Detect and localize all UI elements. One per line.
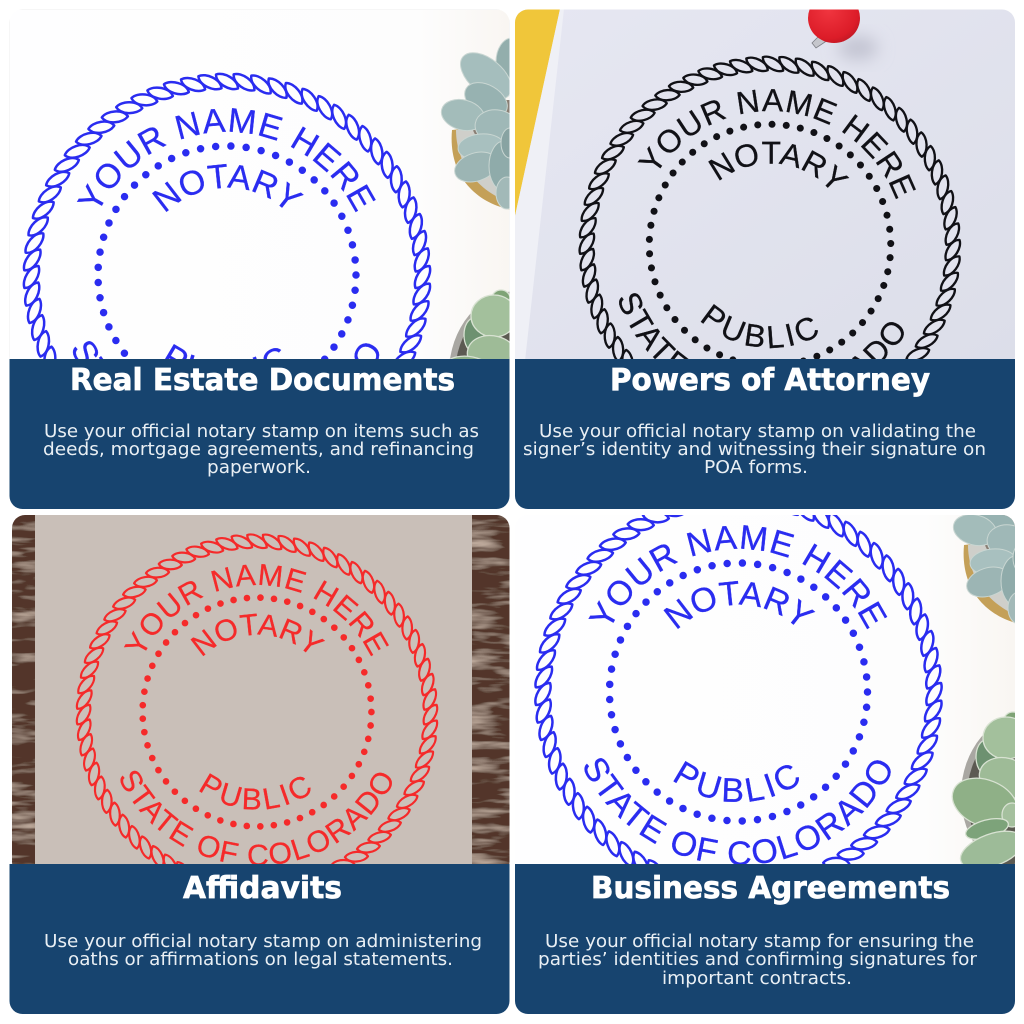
description: signer’s identity and witnessing their signature on — [523, 439, 986, 460]
description: oaths or affirmations on legal statements. — [68, 949, 453, 970]
caption bar — [515, 359, 1015, 509]
photo: white desk with succulents and blue stamp — [10, 10, 510, 359]
description — [523, 421, 986, 478]
heading: Affidavits — [183, 871, 342, 906]
description: Use your official notary stamp on administering — [44, 931, 482, 952]
description: important contracts. — [662, 968, 852, 989]
stamp: black notary seal: NOTARY — [708, 142, 850, 188]
heading: Business Agreements — [591, 871, 950, 906]
description: parties’ identities and confirming signatures for — [538, 949, 978, 970]
caption bar — [10, 359, 510, 509]
panel: affidavits — [10, 515, 510, 1014]
icon: succulent top — [440, 38, 510, 210]
panel: business agreements — [515, 515, 1015, 1014]
description: POA forms. — [704, 457, 808, 478]
stamp: black notary seal: PUBLIC — [700, 304, 818, 348]
stamp: blue notary seal: STATE OF COLORADO — [584, 758, 891, 864]
photo: cardboard on wood with red stamp — [12, 515, 510, 864]
description: deeds, mortgage agreements, and refinancing — [43, 439, 474, 460]
stamp: red notary seal: PUBLIC — [199, 773, 311, 810]
stamp: black notary seal: YOUR NAME HERE — [638, 89, 916, 200]
wood background — [12, 515, 510, 875]
stamp: black notary seal: STATE OF COLORADO — [619, 293, 904, 359]
yellow folder — [515, 9, 560, 216]
stamp: blue notary seal: STATE OF COLORADO — [72, 341, 380, 359]
description: Use your official notary stamp on items such as — [44, 421, 479, 442]
caption bar — [515, 864, 1015, 1014]
panel: powers of attorney — [515, 10, 1015, 509]
icon: succulent top — [952, 515, 1015, 624]
white paper edge — [515, 9, 564, 370]
heading: Powers of Attorney — [610, 363, 930, 398]
description — [538, 931, 978, 989]
heading: Real Estate Documents — [70, 363, 455, 398]
description — [44, 931, 482, 970]
stamp: blue notary seal: PUBLIC — [673, 761, 799, 802]
stamp: red notary seal: YOUR NAME HERE — [124, 564, 389, 656]
stamp: blue notary seal: YOUR NAME HERE — [76, 108, 376, 212]
stamp: blue notary seal: PUBLIC — [165, 344, 282, 359]
cardboard sheet — [35, 515, 472, 875]
stamp: blue notary seal: NOTARY — [152, 164, 304, 212]
photo: white desk with succulents and blue stamp — [534, 515, 1015, 864]
description: Use your official notary stamp for ensuring the — [545, 931, 974, 952]
stamp: red notary seal: NOTARY — [190, 614, 325, 656]
description: Use your official notary stamp on validating the — [539, 421, 976, 442]
stamp: red notary seal — [76, 533, 438, 864]
stamp: blue notary seal: NOTARY — [664, 580, 816, 629]
stamp: blue notary seal: YOUR NAME HERE — [588, 525, 888, 630]
stamp: red notary seal: STATE OF COLORADO — [120, 770, 392, 864]
icon: succulent bottom — [952, 712, 1015, 864]
caption bar — [10, 864, 510, 1014]
panel: real estate documents — [10, 10, 510, 509]
icon: succulent bottom — [450, 290, 510, 359]
description: paperwork. — [207, 457, 311, 478]
icon: pushpin — [808, 0, 878, 60]
stamp: blue notary seal — [534, 515, 943, 864]
photo: paper sheet with pushpin and black stamp — [515, 10, 1015, 359]
stamp: blue notary seal — [22, 72, 432, 359]
description — [43, 421, 479, 478]
stamp: black notary seal — [578, 56, 962, 359]
